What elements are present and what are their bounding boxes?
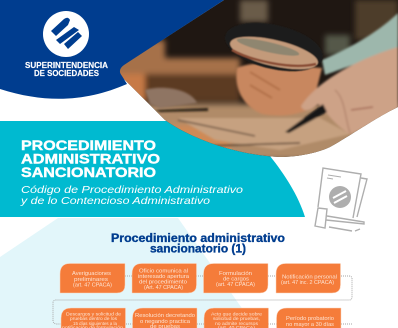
heading: chart title: sancionatorio (1) [150, 244, 246, 256]
panel: teal title band [0, 121, 305, 217]
panel: blue header with logo [0, 0, 224, 99]
step: averiguaciones: preliminares [74, 277, 108, 283]
step: resolución: o negando practica [140, 319, 190, 325]
step: período probatorio: no mayor a 30 días [286, 322, 334, 328]
step: descargos: Descargos y solicitud de [66, 312, 121, 318]
title: PROCEDIMIENTO [21, 138, 156, 153]
step: formulación [204, 264, 268, 293]
step: notificación: Notificación personal [282, 274, 337, 280]
step: período probatorio: Período probatorio [286, 316, 334, 322]
step: oficio: (Art. 47 CPACA) [144, 285, 183, 291]
heading: chart title: Procedimiento administrativo [111, 233, 285, 245]
step: oficio: del procedimiento [139, 280, 187, 286]
step: resolución: Resolución decretando [135, 313, 195, 319]
photo: hand with magnifying glass [110, 0, 398, 160]
step: oficio [132, 264, 196, 293]
step: acto: Acto que decide sobre [211, 312, 262, 318]
icon: gavel and document [315, 168, 367, 231]
step: acto: solicitud de pruebas, [213, 316, 260, 322]
step: acto [204, 308, 268, 328]
step: resolución [132, 308, 197, 328]
subtitle [20, 184, 243, 207]
subtitle: y de lo Contencioso Administrativo [20, 195, 210, 207]
subtitle: Código de Procedimiento Administrativo [21, 184, 243, 196]
step: averiguaciones [60, 264, 125, 293]
step: formulación: (art. 47 CPACA) [216, 282, 255, 288]
step: descargos: pruebas dentro de los [70, 316, 118, 322]
step: notificación [276, 264, 340, 293]
logo text [25, 61, 108, 78]
step: descargos [61, 308, 126, 328]
flow row 1 [60, 264, 340, 293]
title: ADMINISTRATIVO [21, 152, 160, 166]
flow row 2 [61, 308, 341, 328]
step: formulación: de cargos [223, 276, 249, 282]
logo text: DE SOCIEDADES [34, 69, 100, 78]
title: SANCIONATORIO [21, 165, 156, 180]
icon: logo circle [43, 11, 89, 57]
flow connectors [53, 276, 352, 324]
step: averiguaciones: Averiguaciones [72, 271, 111, 277]
step: acto: no admite recursos [215, 321, 259, 327]
step: formulación: Formulación [219, 271, 252, 277]
step: descargos: 15 días siguientes a la [73, 321, 117, 327]
step: notificación: (art. 47 inc. 2 CPACA) [281, 280, 334, 286]
title [21, 138, 160, 180]
step: averiguaciones: (art. 47 CPACA) [73, 282, 112, 288]
logo text: SUPERINTENDENCIA [25, 61, 108, 70]
step: período probatorio [276, 308, 341, 328]
step: oficio: Oficio comunica al [139, 269, 188, 275]
step: oficio: interesado apertura [138, 274, 189, 280]
heading: chart title [111, 233, 285, 256]
light background shape [0, 218, 256, 328]
